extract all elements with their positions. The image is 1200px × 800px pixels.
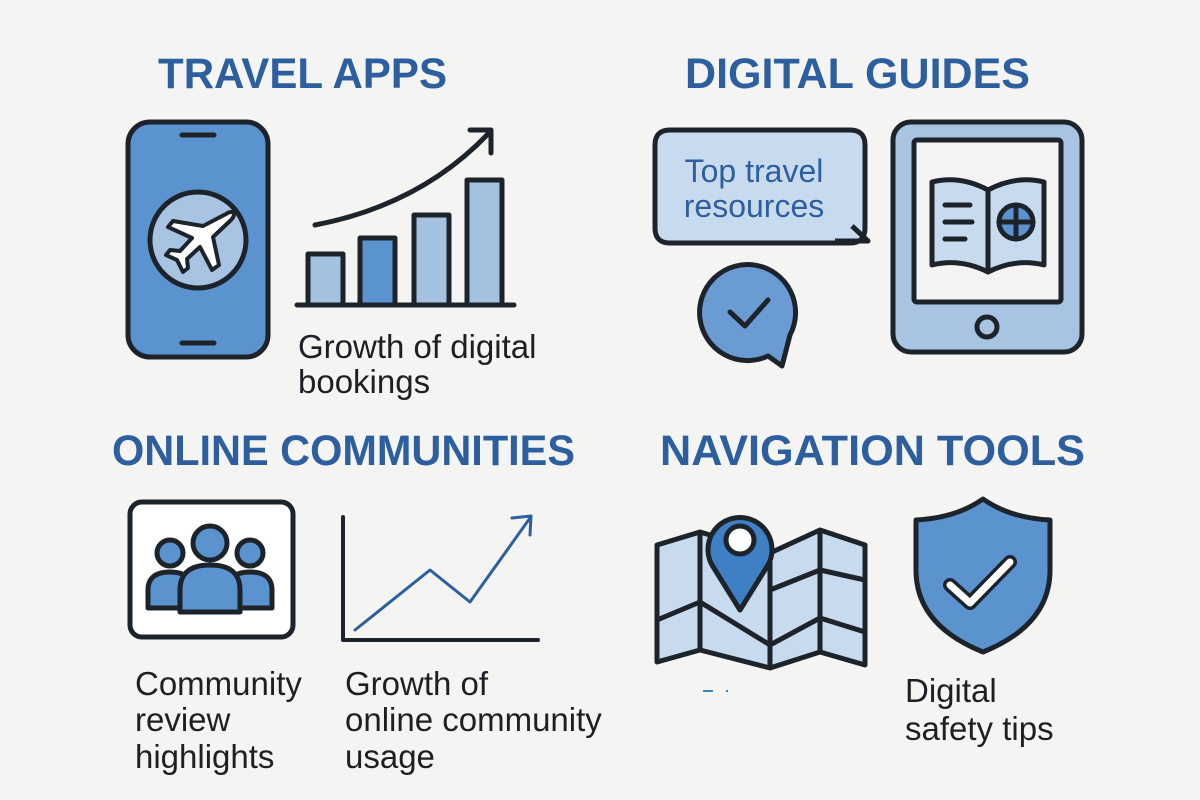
text: growth of online community usage: Growth of [345, 665, 488, 702]
title: travel apps: TRAVEL APPS [158, 50, 447, 98]
text: community review highlights: highlights [135, 738, 274, 775]
icon: shield check [916, 499, 1050, 652]
title: digital guides: DIGITAL GUIDES [685, 50, 1030, 98]
speech bubble: top travel resources: resources [684, 188, 824, 224]
icon: phone with plane [128, 122, 268, 357]
title: online communities: ONLINE COMMUNITIES [112, 427, 575, 475]
text: community review highlights: review [135, 701, 231, 738]
text: community review highlights: Community [135, 665, 302, 702]
text: digital safety tips: Digital [905, 672, 997, 709]
title: navigation tools: NAVIGATION TOOLS [660, 427, 1085, 475]
icon: tablet with guidebook [893, 122, 1082, 352]
bar chart: growth of digital bookings [297, 130, 514, 305]
speech bubble: top travel resources: Top travel [685, 153, 823, 189]
decorative marks [703, 690, 728, 692]
text: growth of digital bookings: Growth of digital [298, 328, 536, 365]
speech bubble: top travel resources [655, 130, 868, 243]
text: growth of online community usage: online community [345, 701, 602, 738]
text: digital safety tips: safety tips [905, 710, 1054, 747]
icon: community group box [130, 502, 293, 637]
text: growth of online community usage: usage [345, 738, 435, 775]
line chart: online community usage [343, 516, 538, 640]
text: growth of digital bookings: bookings [298, 363, 430, 400]
icon: chat check [700, 265, 796, 366]
icon: folded map with pin [657, 518, 865, 668]
